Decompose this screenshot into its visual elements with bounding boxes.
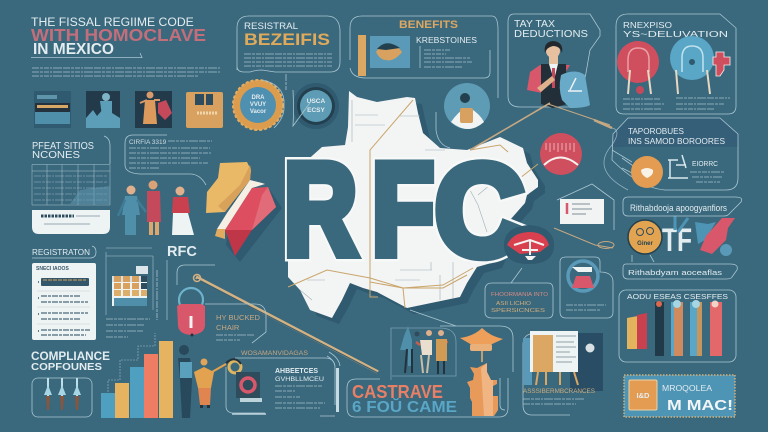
TF letters: TF <box>662 222 692 258</box>
panel: taporobues <box>612 118 738 190</box>
panel: text callout <box>125 135 212 185</box>
letter fill: R <box>284 136 357 282</box>
RFC label: RFC <box>167 244 197 260</box>
circle seal <box>293 83 339 129</box>
letter fill <box>284 136 524 283</box>
circle seal: USCA <box>307 98 326 105</box>
circle: worker <box>444 83 490 129</box>
map gray borders <box>300 100 490 300</box>
panel: ahbeetces: WOSAMANVIDAGAS <box>241 350 309 357</box>
blue shield <box>560 72 590 108</box>
circle: red stamp <box>540 133 582 175</box>
panel: people group <box>391 326 456 380</box>
badge: DRA <box>252 95 265 101</box>
letter outlines: F <box>372 136 434 282</box>
panel: hy bucked chair <box>205 304 266 343</box>
panel: grid chart <box>106 248 167 337</box>
panel: stamp macro: I&D <box>637 391 650 400</box>
letter outlines: R <box>284 136 357 282</box>
padlock <box>177 265 215 336</box>
icon: figure on dark card <box>86 91 120 128</box>
panel: registral benefits <box>237 16 340 128</box>
pill: rithabdooja: Rithabdooja apoogyanfiors <box>630 203 727 213</box>
panel: stamp macro: M MAC! <box>667 398 733 414</box>
panel: text callout: CIRFIA 3319 <box>129 139 167 146</box>
panel: registration: REGISTRATON <box>32 248 90 257</box>
panel: rnexpiso <box>616 14 736 114</box>
person right <box>172 186 194 235</box>
panel: ahbeetces: GVHBLLMCEU <box>275 377 324 383</box>
panel: fhoormania: SPERSICNCES <box>491 308 545 314</box>
panel: bar chart right: AODU ESEAS CSESFFES <box>627 292 728 301</box>
panel: registral benefits: BEZEIFIS <box>244 30 330 49</box>
badge: VVUY <box>250 102 266 108</box>
panel: rnexpiso: RNEXPISO <box>623 20 672 30</box>
letter fill: C <box>435 137 524 283</box>
letter fill: F <box>372 136 434 282</box>
bars <box>627 300 722 356</box>
panel: stamp macro: MROQOLEA <box>662 383 712 393</box>
panel: bar chart right <box>619 290 736 362</box>
panel: taporobues: TAPOROBUES <box>628 127 684 136</box>
panel: tax deductions <box>508 14 600 108</box>
panel: registration <box>32 246 96 340</box>
panel: document <box>523 331 603 415</box>
panel: rnexpiso: YS~DELUVATION <box>623 29 728 39</box>
red circle <box>617 41 659 94</box>
orange person <box>194 358 226 408</box>
big RFC letters <box>284 136 524 283</box>
panel: ring icon <box>560 257 613 318</box>
icon: laptop <box>34 91 71 128</box>
bar chart <box>101 333 173 418</box>
panel: pfeat sitios: NCONES <box>32 150 80 161</box>
panel: benefits: BENEFITS <box>399 19 458 31</box>
panel: taporobues: EIORRC <box>692 161 718 168</box>
white document near map <box>557 184 614 230</box>
person in suit <box>527 41 570 108</box>
icon: red and blue figures <box>675 216 735 256</box>
panel: hy bucked chair: HY BUCKED <box>216 313 261 322</box>
registration card: SNECI IAOOS <box>36 266 69 272</box>
icon: people on dark card <box>135 91 172 128</box>
long diagonal band <box>194 274 378 373</box>
title: THE FISSAL REGIIME CODE <box>31 15 194 29</box>
panel: castrave <box>347 378 508 417</box>
icon: face circle: Giner <box>637 241 654 247</box>
panel: benefits <box>350 16 498 98</box>
orange hat and tower <box>440 326 513 416</box>
dark person <box>178 345 192 418</box>
panel: tax deductions: DEDUCTIONS <box>514 29 588 40</box>
panel: document: ASSSIBERMBCRANCES <box>523 389 595 395</box>
panel: fhoormania: ASII LICHIO <box>496 301 532 307</box>
title: IN MEXICO <box>33 41 114 58</box>
letter outlines <box>284 136 524 283</box>
compliance heading <box>31 349 110 373</box>
intro paragraph <box>32 68 220 76</box>
panel: castrave: CASTRAVE <box>352 382 443 402</box>
panel: hy bucked chair: CHAIR <box>216 323 240 332</box>
panel: fhoormania: FHOORMANIA INTO <box>491 292 549 298</box>
panel: benefits: KREBSTOINES <box>416 36 477 45</box>
blue circle <box>670 36 714 94</box>
pill: rithabdooja <box>623 197 742 216</box>
icons: face circle, TF, red figure <box>628 216 735 262</box>
icon: red mushroom <box>504 225 554 264</box>
compliance heading: COPFOUNES <box>31 361 102 373</box>
panel: fhoormania <box>485 268 553 318</box>
panel: taporobues: INS SAMOD BOROORES <box>628 137 725 146</box>
person middle <box>147 180 161 235</box>
panel: pfeat sitios <box>32 136 110 234</box>
panel: castrave: 6 FOŬ CAME <box>352 397 457 416</box>
table <box>32 164 110 205</box>
panel: pfeat sitios: PFEAT SITIOS <box>32 141 94 152</box>
pill: rithabdyam: Rithabdyam aoceaflas <box>628 268 722 277</box>
panel: ahbeetces: AHBEETCES <box>275 368 318 375</box>
badge: Vacor <box>250 109 267 115</box>
white card <box>32 210 110 234</box>
panel: ahbeetces <box>226 350 340 416</box>
panel: tax deductions: TAY TAX <box>514 19 555 30</box>
central map of Mexico <box>285 91 545 324</box>
3D yellow and red shape <box>206 162 282 262</box>
connector lines <box>436 103 628 248</box>
lines from map to bottom <box>410 310 456 326</box>
icon row <box>34 80 339 130</box>
icon: orange box <box>186 92 223 128</box>
map roads <box>288 100 538 308</box>
person left <box>118 186 146 235</box>
panel: three arrows <box>32 378 92 417</box>
pill: rithabdyam <box>623 264 737 279</box>
circle seal: ECSY <box>307 107 326 114</box>
badge <box>233 80 283 130</box>
letter outlines: C <box>435 137 524 283</box>
panel: registral benefits: RESISTRAL <box>244 21 298 31</box>
figures near bars <box>178 345 226 418</box>
panel: stamp macro <box>624 375 735 417</box>
three people <box>118 180 194 235</box>
title: WITH HOMOCLAVE <box>31 25 206 45</box>
title <box>31 15 206 58</box>
compliance heading: COMPLIANCE <box>31 349 110 363</box>
red cross <box>713 52 730 76</box>
